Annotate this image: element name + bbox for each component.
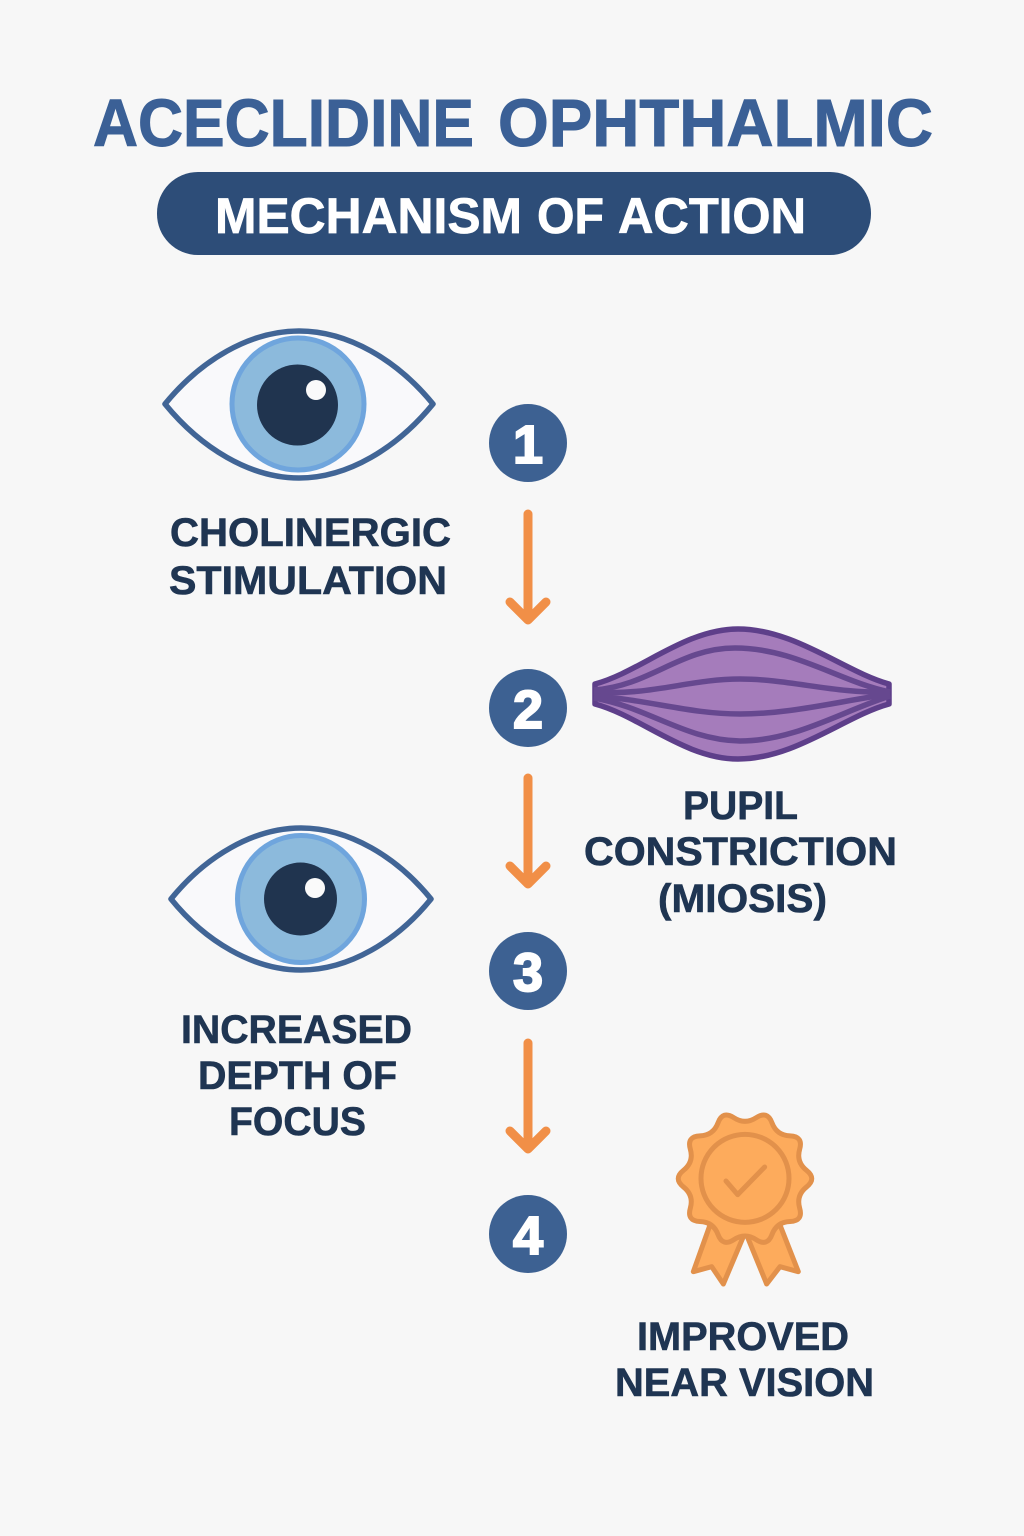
step 4 badge [489, 1195, 567, 1273]
title: ACECLIDINE [93, 86, 474, 161]
icon: eye, increased depth of focus [171, 828, 431, 970]
step 2 badge: 2 [513, 680, 543, 740]
label: improved near vision: NEAR VISION [615, 1361, 874, 1405]
label: pupil constriction [584, 784, 897, 921]
title [93, 86, 933, 161]
arrow 2 to 3 [510, 778, 546, 884]
icon: award rosette [678, 1115, 812, 1284]
arrow 1 to 2 [510, 514, 546, 620]
subtitle pill: ACTION [618, 188, 806, 244]
label: pupil constriction: CONSTRICTION [584, 830, 897, 874]
step 2 badge [489, 669, 567, 747]
label: pupil constriction: (MIOSIS) [658, 877, 827, 921]
label: cholinergic stimulation: CHOLINERGIC [170, 511, 451, 555]
icon: eye, cholinergic stimulation [165, 331, 433, 478]
label: cholinergic stimulation: STIMULATION [169, 559, 447, 603]
step 1 badge [489, 404, 567, 482]
arrow 3 to 4 [510, 1043, 546, 1149]
label: pupil constriction: PUPIL [683, 784, 798, 828]
label: cholinergic stimulation [169, 511, 451, 603]
step 1 badge: 1 [513, 415, 543, 475]
step 3 badge [489, 932, 567, 1010]
step 4 badge: 4 [513, 1206, 543, 1266]
title: OPHTHALMIC [498, 86, 933, 161]
label: improved near vision [615, 1315, 874, 1405]
label: increased depth of focus: DEPTH OF [198, 1054, 397, 1098]
label: increased depth of focus [181, 1008, 412, 1144]
label: increased depth of focus: FOCUS [229, 1100, 366, 1144]
step 3 badge: 3 [513, 943, 543, 1003]
subtitle pill: MECHANISM [215, 188, 522, 244]
icon: ciliary muscle [594, 629, 890, 759]
label: increased depth of focus: INCREASED [181, 1008, 412, 1052]
subtitle pill: OF [537, 188, 604, 244]
label: improved near vision: IMPROVED [637, 1315, 849, 1359]
subtitle pill [157, 172, 871, 255]
